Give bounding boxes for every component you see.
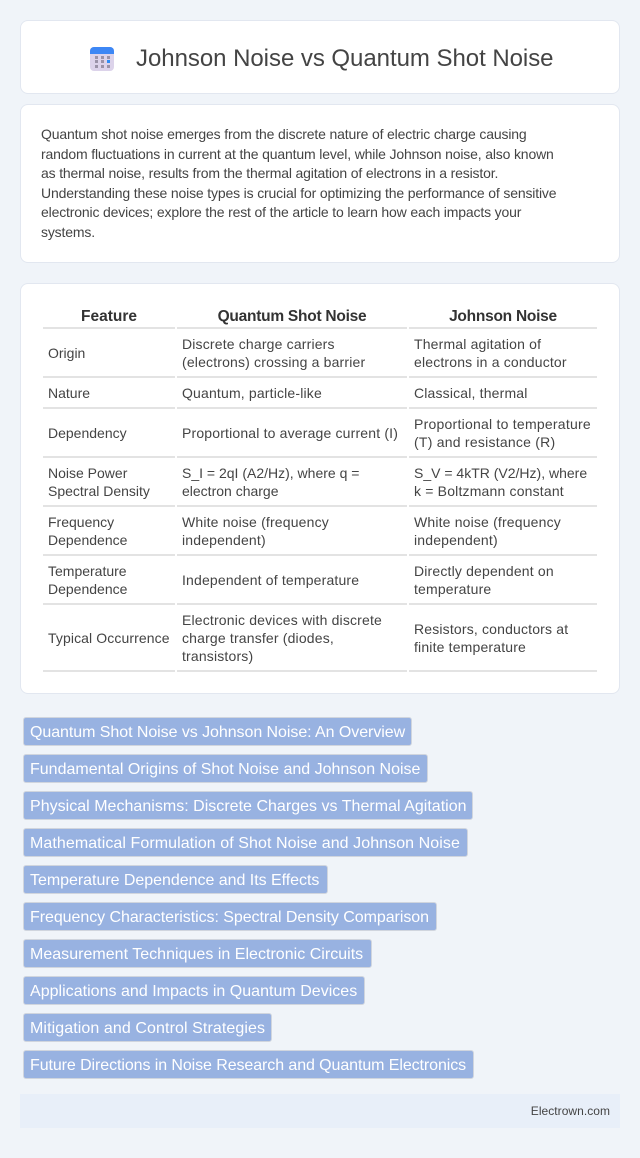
row: noise power spectral density: Spectral Density <box>48 483 150 499</box>
comparison table: Proportional to average current (I) <box>182 425 398 441</box>
intro text: electronic devices; explore the rest of the article to learn how each impacts your <box>41 204 521 220</box>
link button <box>23 1013 272 1042</box>
comparison table: electron charge <box>182 483 279 499</box>
link button <box>23 976 365 1005</box>
intro text: systems. <box>41 224 95 240</box>
link button: Quantum Shot Noise vs Johnson Noise: An Overview <box>30 724 405 741</box>
comparison table: Independent of temperature <box>182 572 359 588</box>
row: nature: Nature <box>48 385 90 401</box>
link button <box>23 865 328 894</box>
comparison table: electrons in a conductor <box>414 354 567 370</box>
row: dependency: Dependency <box>48 425 127 441</box>
link button: Measurement Techniques in Electronic Circuits <box>30 946 363 963</box>
row: temperature dependence: Temperature <box>48 563 127 579</box>
link button: Applications and Impacts in Quantum Devices <box>30 983 357 1000</box>
comparison table: charge transfer (diodes, <box>182 630 334 646</box>
panel: title header <box>20 20 620 94</box>
comparison table: (electrons) crossing a barrier <box>182 354 365 370</box>
link button <box>23 717 412 746</box>
intro text: random fluctuations in current at the quantum level, while Johnson noise, also known <box>41 146 554 162</box>
link button <box>23 791 473 820</box>
intro text: Quantum shot noise emerges from the discrete nature of electric charge causing <box>41 126 527 142</box>
row: frequency dependence <box>48 514 127 548</box>
panel: comparison table <box>20 283 620 694</box>
title: Johnson Noise vs Quantum Shot Noise <box>136 45 554 72</box>
comparison table: Johnson Noise <box>449 308 557 325</box>
comparison table <box>43 308 597 672</box>
link button <box>23 1050 474 1079</box>
footer <box>20 1094 620 1128</box>
footer credit: Electrown.com <box>531 1104 610 1118</box>
row: temperature dependence <box>48 563 127 597</box>
row: noise power spectral density: Noise Power <box>48 465 127 481</box>
intro text: as thermal noise, results from the thermal agitation of electrons in a resistor. <box>41 165 498 181</box>
link button: Frequency Characteristics: Spectral Density Comparison <box>30 909 429 926</box>
row: temperature dependence: Dependence <box>48 581 127 597</box>
link button: Fundamental Origins of Shot Noise and Johnson Noise <box>30 761 420 778</box>
comparison table: Resistors, conductors at <box>414 621 568 637</box>
row: typical occurrence: Typical Occurrence <box>48 630 170 646</box>
link button <box>23 828 468 857</box>
comparison table: Discrete charge carriers <box>182 336 335 352</box>
row: frequency dependence: Frequency <box>48 514 114 530</box>
comparison table: (T) and resistance (R) <box>414 434 555 450</box>
comparison table: independent) <box>182 532 266 548</box>
comparison table: independent) <box>414 532 498 548</box>
row: frequency dependence: Dependence <box>48 532 127 548</box>
comparison table: Quantum Shot Noise <box>218 308 366 325</box>
link button: Mitigation and Control Strategies <box>30 1020 265 1037</box>
panel: intro paragraph <box>20 104 620 263</box>
comparison table: Proportional to temperature <box>414 416 591 432</box>
comparison table: k = Boltzmann constant <box>414 483 564 499</box>
comparison table: transistors) <box>182 648 253 664</box>
comparison table: Classical, thermal <box>414 385 528 401</box>
section link buttons <box>23 717 474 1079</box>
link button: Future Directions in Noise Research and Quantum Electronics <box>30 1057 466 1074</box>
comparison table: temperature <box>414 581 491 597</box>
comparison table: White noise (frequency <box>182 514 329 530</box>
comparison table: S_V = 4kTR (V2/Hz), where <box>414 465 587 481</box>
comparison table: Quantum, particle-like <box>182 385 322 401</box>
link button: Temperature Dependence and Its Effects <box>30 872 319 889</box>
row: noise power spectral density <box>48 465 150 499</box>
comparison table: S_I = 2qI (A2/Hz), where q = <box>182 465 359 481</box>
comparison table: Thermal agitation of <box>414 336 541 352</box>
link button <box>23 902 437 931</box>
icon: calendar <box>90 47 114 71</box>
comparison table: Directly dependent on <box>414 563 554 579</box>
table header: Feature <box>81 308 137 325</box>
intro text <box>41 126 556 240</box>
comparison table: finite temperature <box>414 639 526 655</box>
comparison table: Electronic devices with discrete <box>182 612 382 628</box>
intro text: Understanding these noise types is crucial for optimizing the performance of sensitive <box>41 184 556 200</box>
link button <box>23 754 428 783</box>
comparison table: White noise (frequency <box>414 514 561 530</box>
link button: Physical Mechanisms: Discrete Charges vs Thermal Agitation <box>30 798 467 815</box>
link button <box>23 939 372 968</box>
row: origin: Origin <box>48 345 85 361</box>
link button: Mathematical Formulation of Shot Noise and Johnson Noise <box>30 835 460 852</box>
